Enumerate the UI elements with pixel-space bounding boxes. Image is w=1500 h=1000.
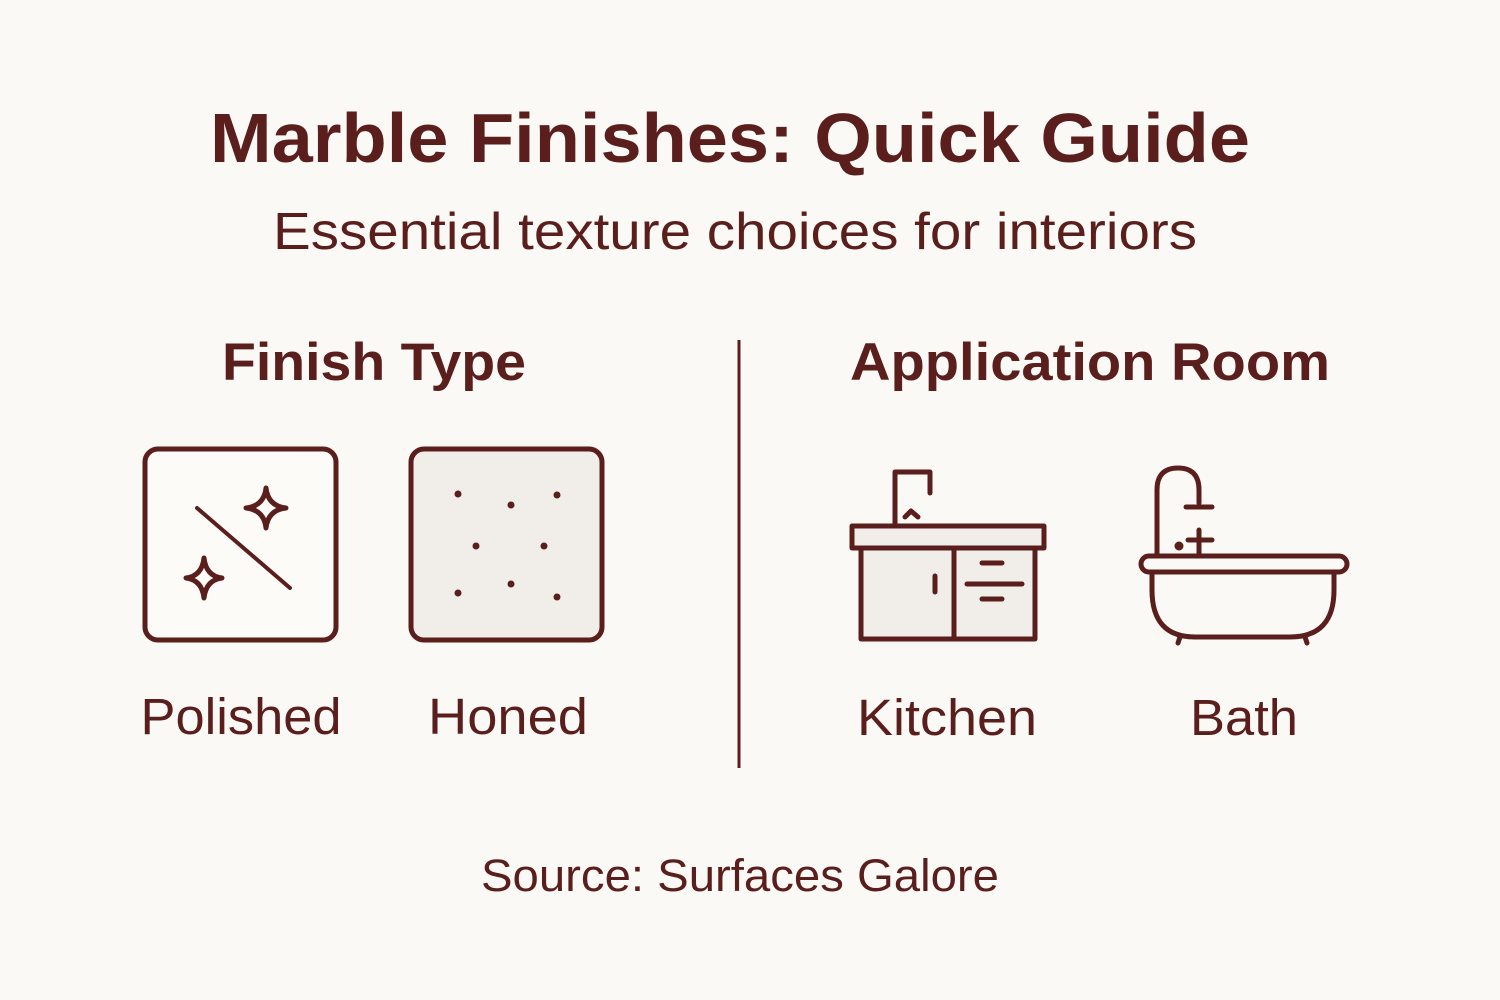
label: polished: Polished xyxy=(140,688,342,745)
title: Marble Finishes: Quick Guide xyxy=(210,99,1250,177)
heading: finish type: Finish Type xyxy=(222,333,526,392)
icon: honed xyxy=(411,449,602,640)
label: bath: Bath xyxy=(1190,689,1298,746)
heading: application room: Application Room xyxy=(850,333,1330,392)
icon: bath xyxy=(1141,468,1347,643)
icon: kitchen xyxy=(852,472,1044,639)
source: Source: Surfaces Galore xyxy=(481,850,999,901)
icon: polished xyxy=(145,449,336,640)
subtitle: Essential texture choices for interiors xyxy=(273,203,1197,261)
label: honed: Honed xyxy=(428,688,588,745)
label: kitchen: Kitchen xyxy=(857,689,1037,746)
